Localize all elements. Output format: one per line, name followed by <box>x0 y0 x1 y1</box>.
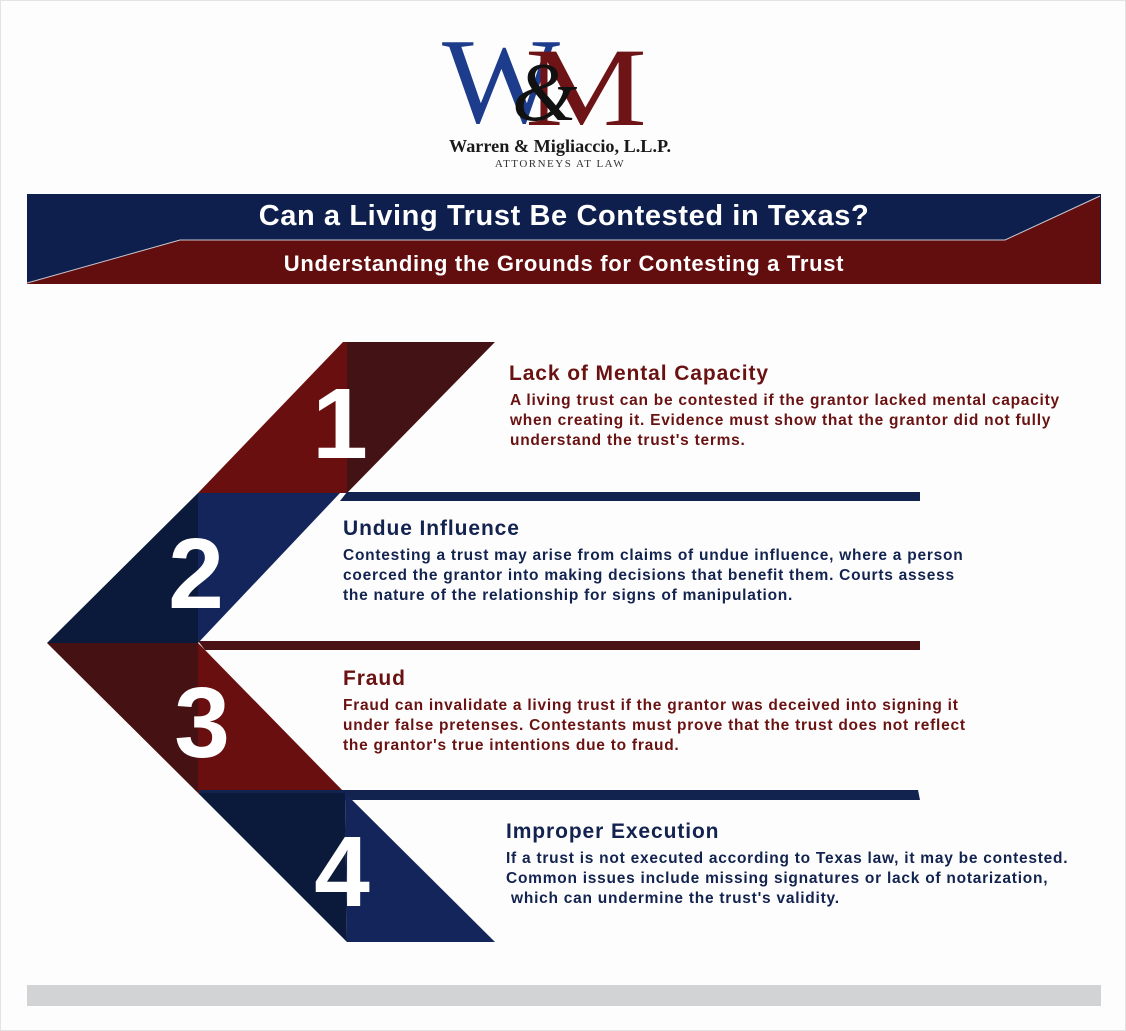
logo: Warren & Migliaccio, L.L.P. <box>449 136 671 156</box>
item 3 text: under false pretenses. Contestants must prove that the trust does not reflect <box>343 717 966 734</box>
banner <box>27 194 1101 284</box>
step 1 shape: 1 <box>312 368 368 480</box>
chevron graphic <box>47 342 920 942</box>
subtitle: Understanding the Grounds for Contesting a Trust <box>284 251 844 276</box>
item 4 text: Improper Execution <box>506 820 719 843</box>
line 2 <box>198 641 920 650</box>
step 2 shape <box>47 493 340 643</box>
item 3 text: Fraud <box>343 667 406 690</box>
item 4 text: If a trust is not executed according to Texas law, it may be contested. <box>506 850 1068 867</box>
item 1 text: when creating it. Evidence must show that the grantor did not fully <box>510 412 1051 429</box>
logo: & <box>512 46 578 139</box>
item 1 text: understand the trust's terms. <box>510 432 746 449</box>
item 1 text: A living trust can be contested if the grantor lacked mental capacity <box>510 392 1060 409</box>
logo: M <box>525 26 647 150</box>
logo <box>442 25 671 170</box>
line 3 <box>198 790 920 800</box>
title: Can a Living Trust Be Contested in Texas? <box>259 200 869 232</box>
step 4 shape <box>198 793 495 942</box>
step 2 shape: 2 <box>168 518 224 630</box>
item 4 text <box>506 820 1068 907</box>
item 2 text: Undue Influence <box>343 517 520 540</box>
item 2 text: the nature of the relationship for signs of manipulation. <box>343 587 793 604</box>
item 2 text <box>343 517 963 604</box>
step 4 shape: 4 <box>314 816 370 928</box>
step 3 shape: 3 <box>174 667 230 779</box>
line 1 <box>340 492 920 501</box>
item 2 text: coerced the grantor into making decisions that benefit them. Courts assess <box>343 567 955 584</box>
item 3 text: Fraud can invalidate a living trust if the grantor was deceived into signing it <box>343 697 959 714</box>
item 1 text: Lack of Mental Capacity <box>509 362 769 385</box>
item 3 text: the grantor's true intentions due to fraud. <box>343 737 679 754</box>
item 4 text: which can undermine the trust's validity. <box>511 890 840 907</box>
item 4 text: Common issues include missing signatures or lack of notarization, <box>506 870 1048 887</box>
item 2 text: Contesting a trust may arise from claims of undue influence, where a person <box>343 547 963 564</box>
step 1 shape <box>198 342 495 493</box>
logo: ATTORNEYS AT LAW <box>495 158 625 170</box>
item 1 text <box>509 362 1060 449</box>
item 3 text <box>343 667 966 754</box>
footer bar <box>27 985 1101 1006</box>
step 3 shape <box>47 643 345 793</box>
